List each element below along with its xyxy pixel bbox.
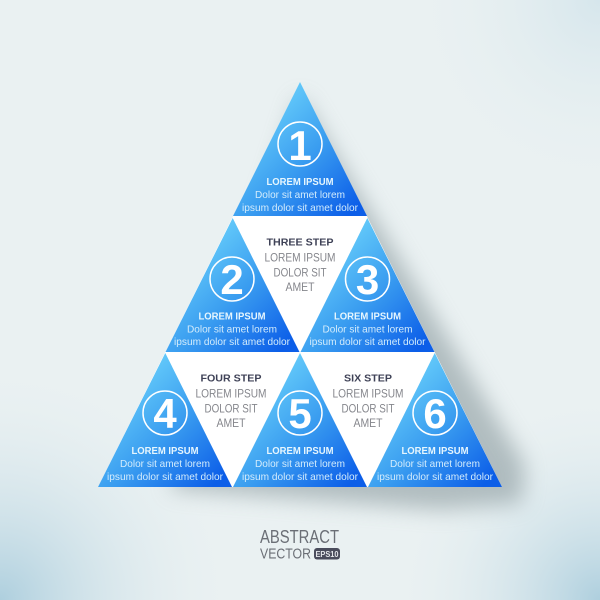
panel: step 6: LOREM IPSUM bbox=[402, 446, 468, 457]
text block: four step: DOLOR SIT bbox=[204, 402, 258, 416]
panel: step 5 bbox=[233, 353, 367, 487]
panel: step 5: Dolor sit amet lorem bbox=[255, 458, 345, 470]
panel: step 6: 6 bbox=[423, 390, 447, 437]
panel: step 2: Dolor sit amet lorem bbox=[187, 324, 277, 336]
panel: step 4: LOREM IPSUM bbox=[132, 446, 198, 457]
panel: step 2: LOREM IPSUM bbox=[198, 312, 266, 322]
panel: step 3: 3 bbox=[356, 256, 379, 303]
text block: four step bbox=[196, 372, 266, 430]
footer logo: abstract vector EPS10 bbox=[260, 527, 340, 562]
panel: step 3: Dolor sit amet lorem bbox=[322, 324, 413, 336]
panel: step 5: 5 bbox=[288, 390, 312, 437]
footer logo: abstract vector EPS10: EPS10 bbox=[316, 550, 339, 559]
panel: step 3: ipsum dolor sit amet dolor bbox=[310, 336, 426, 348]
panel: step 5: ipsum dolor sit amet dolor bbox=[242, 471, 358, 483]
panel: step 2 bbox=[166, 218, 300, 352]
text block: six step: AMET bbox=[354, 416, 383, 430]
text block: three step bbox=[264, 236, 336, 294]
text block: four step: LOREM IPSUM bbox=[196, 386, 266, 400]
text block: three step: LOREM IPSUM bbox=[264, 250, 336, 264]
panel: step 5: LOREM IPSUM bbox=[266, 446, 334, 457]
text block: three step: THREE STEP bbox=[266, 236, 334, 248]
panel: step 6 bbox=[368, 353, 502, 487]
panel: step 1: ipsum dolor sit amet dolor bbox=[242, 202, 358, 214]
text block: three step: DOLOR SIT bbox=[274, 266, 327, 280]
panel: step 4: Dolor sit amet lorem bbox=[120, 458, 210, 470]
panel: step 6: ipsum dolor sit amet dolor bbox=[377, 471, 493, 483]
panel: step 2: 2 bbox=[220, 256, 244, 303]
panel: step 1: Dolor sit amet lorem bbox=[255, 189, 345, 201]
panel: step 3 bbox=[300, 218, 434, 352]
text block: six step: DOLOR SIT bbox=[342, 402, 395, 416]
text block: six step bbox=[332, 372, 404, 430]
pyramid white base bbox=[98, 82, 502, 487]
text block: six step: LOREM IPSUM bbox=[332, 386, 404, 400]
pyramid shadow bbox=[170, 95, 525, 510]
panel: step 4: 4 bbox=[153, 390, 177, 437]
panel: step 2: ipsum dolor sit amet dolor bbox=[174, 336, 290, 348]
panel: step 1: LOREM IPSUM bbox=[266, 177, 334, 188]
panel: step 1 bbox=[233, 82, 367, 216]
text block: four step: FOUR STEP bbox=[200, 372, 262, 384]
text block: six step: SIX STEP bbox=[344, 372, 392, 384]
panel: step 4 bbox=[98, 353, 232, 487]
footer logo: abstract vector EPS10: ABSTRACT bbox=[260, 527, 339, 547]
text block: three step: AMET bbox=[286, 280, 315, 294]
panel: step 1: 1 bbox=[288, 122, 312, 169]
panel: step 3: LOREM IPSUM bbox=[334, 312, 401, 322]
panel: step 6: Dolor sit amet lorem bbox=[390, 458, 480, 470]
text block: four step: AMET bbox=[216, 416, 246, 430]
footer logo: abstract vector EPS10: VECTOR bbox=[260, 546, 311, 562]
panel: step 4: ipsum dolor sit amet dolor bbox=[107, 471, 223, 483]
